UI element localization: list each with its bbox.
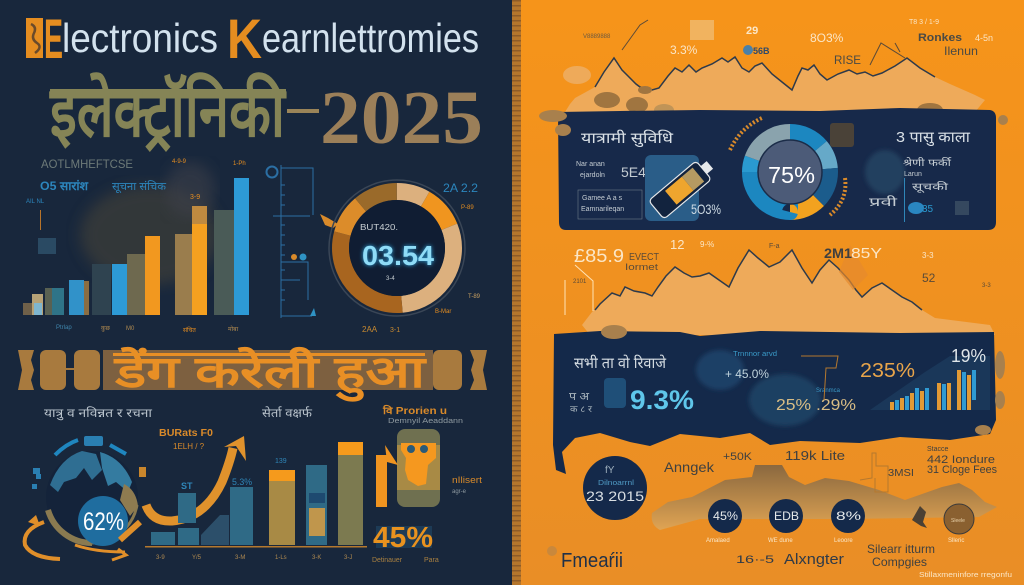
stat circle: 8%: 8% xyxy=(836,509,861,523)
text: section labels: यात्रु व नविन्नत र रचना xyxy=(44,406,153,421)
text: lower right labels: 3MSI xyxy=(888,468,914,479)
stat circle: centre: EDB xyxy=(774,509,799,523)
chart: upper orange mountain line: T8 3 / 1-9 xyxy=(909,19,939,26)
bar chart: rising bars: कुछ xyxy=(101,326,111,332)
bar chart: lower columns: 5.3% xyxy=(232,477,252,487)
bar chart: rising bars: M0 xyxy=(126,326,135,332)
stat circle: 45%: Amalaed xyxy=(706,538,730,544)
text: footer labels: Stillaxmeninfore rregonfu xyxy=(919,572,1012,579)
chart: upper orange mountain line: 3.3% xyxy=(670,43,698,57)
chart: lower orange mountain line: 3-3 xyxy=(922,251,934,260)
bar chart: lower columns: 3-M xyxy=(235,555,245,561)
text: footer labels: Alxngter xyxy=(784,551,844,568)
panel: lower navy dashboard with tail: सभी ता वो रिवाजे xyxy=(574,354,667,372)
donut gauge: P-89 xyxy=(461,205,474,211)
stat circle: large year: fY xyxy=(605,465,615,476)
text: footer labels: Silearr itturm xyxy=(867,542,935,556)
text: panel headline right: 3 पासु काला xyxy=(896,129,971,147)
arrow: growth curve: 1ELH / ? xyxy=(173,442,205,451)
title: hindi and year xyxy=(48,72,483,160)
chart: upper orange mountain line: 8O3% xyxy=(810,31,844,45)
panel: lower navy dashboard with tail: प अ xyxy=(569,391,590,403)
text: lower right labels: 442 Iondure xyxy=(927,454,995,466)
stat: 235%: 235% xyxy=(860,360,915,382)
text: panel headline left: यात्रामी सुविधि xyxy=(581,129,674,148)
chart: blue ruler gauge xyxy=(266,165,338,318)
chart: lower orange mountain line: 12 xyxy=(670,237,684,252)
bar chart: lower columns: 1-Ls xyxy=(275,555,287,561)
chart: lower orange mountain line: 52 xyxy=(922,271,936,285)
chart: upper orange mountain line: 56B xyxy=(753,46,770,56)
bar chart: rising bars: 1-Ph xyxy=(233,161,246,167)
chart: mini bars xyxy=(870,356,990,410)
stat: 45%: 45% xyxy=(373,522,433,554)
chart: lower orange mountain line: 9-% xyxy=(700,240,714,249)
text: panel right stats: प्रवी xyxy=(869,195,899,209)
donut gauge: B-Mar xyxy=(435,309,451,315)
bar chart: rising bars: 3-9 xyxy=(190,194,200,201)
arrow: growth curve: BURats F0 xyxy=(159,428,213,439)
bar chart: rising bars: AIL NL xyxy=(26,199,45,205)
stat circle: small brown xyxy=(912,504,974,544)
stat: 19%: 19% xyxy=(951,346,986,366)
panel: lower navy dashboard with tail: Sranmca xyxy=(816,388,841,394)
text: panel right stats: Larun xyxy=(904,171,922,178)
chart: upper orange mountain line xyxy=(563,19,993,117)
striped divider xyxy=(512,0,521,585)
stat: 9.3%: 9.3% xyxy=(630,385,694,415)
stat circle: small brown: Slleric xyxy=(948,538,964,544)
bar chart: rising bars: O5 सारांश xyxy=(40,179,89,193)
text: section labels xyxy=(44,406,313,421)
chart: lower orange mountain line: 85Y xyxy=(851,245,882,262)
stat: 45%: Para xyxy=(424,557,439,564)
donut gauge: 3-1 xyxy=(390,327,400,334)
donut gauge: 03.54 xyxy=(362,240,434,271)
icon: circuit device xyxy=(645,155,721,221)
chart: upper orange mountain line: 4-5n xyxy=(975,33,993,43)
stat circle: centre xyxy=(768,499,803,544)
bottom brown mountain xyxy=(652,465,997,530)
donut gauge: T-89 xyxy=(468,294,481,300)
panel: right orange background xyxy=(512,0,1024,585)
chart: lower orange mountain line: Iormet xyxy=(625,262,659,272)
chart: lower orange mountain line xyxy=(565,237,995,335)
title: english: E xyxy=(44,7,63,70)
chart: upper orange mountain line: V8889888 xyxy=(583,34,611,40)
text: panel left stats: Nar anan xyxy=(576,161,605,168)
donut gauge xyxy=(329,180,481,334)
banner: hindi heading: डेंग करेली हुआ xyxy=(112,346,428,402)
panel: left dark background xyxy=(0,0,512,585)
text: footer labels: Fmeaŕii xyxy=(561,550,623,572)
panel: lower navy dashboard with tail: क ८ र xyxy=(570,404,592,414)
icon: phone mascot: nIlisert xyxy=(452,475,483,485)
title: english: earnlettromies xyxy=(262,15,479,61)
stat: 25% and 29%: 25% .29% xyxy=(776,397,856,414)
panel: upper navy dashboard xyxy=(539,108,1008,230)
icon: phone mascot: Demnyil Aeaddann xyxy=(388,418,463,425)
title: hindi and year: इलेक्ट्रॉनिकी xyxy=(48,72,287,152)
icon: circuit device: 5O3% xyxy=(691,201,721,217)
icon: globe with 62% bubble: 62% xyxy=(83,508,124,536)
icon: globe with 62% bubble xyxy=(25,436,146,560)
chart: lower orange mountain line: £85.9 xyxy=(574,246,624,266)
bar chart: lower columns: 3-J xyxy=(344,555,352,561)
chart: lower orange mountain line: 3-3 xyxy=(982,283,991,289)
text: panel right stats: श्रेणी फर्की xyxy=(903,157,952,169)
bar chart: lower columns: ST xyxy=(181,481,193,491)
title: hindi and year: 2025 xyxy=(320,76,483,160)
title: english: K xyxy=(227,7,262,70)
title: english: lectronics xyxy=(62,15,218,61)
bar chart: rising bars: संचित xyxy=(183,326,196,334)
chart: upper orange mountain line: 29 xyxy=(746,25,758,37)
text: footer labels xyxy=(547,542,1012,579)
chart: upper orange mountain line: Ronkes xyxy=(918,32,962,44)
text: panel right stats: सूचकी xyxy=(912,181,949,193)
icon: phone mascot xyxy=(376,404,483,507)
stat circle: large year: Dilnoarrnl xyxy=(598,480,635,487)
text: panel left stats: 5E4 xyxy=(621,164,646,180)
chart: lower orange mountain line: 2M1 xyxy=(824,245,852,261)
panel: lower navy dashboard with tail xyxy=(553,325,1005,474)
text: panel left stats: Eamnarileqan xyxy=(581,206,624,213)
bar chart: rising bars: मोबा xyxy=(228,325,239,333)
bar chart: lower columns: 3-9 xyxy=(156,555,165,561)
chart: lower orange mountain line: F-a xyxy=(769,243,780,250)
bar chart: rising bars: AOTLMHEFTCSE xyxy=(41,157,133,171)
text: footer labels: Compgies xyxy=(872,555,927,569)
text: panel right stats xyxy=(865,150,969,222)
stat circle: centre: WE dune xyxy=(768,538,793,544)
donut gauge: 03.54 xyxy=(362,240,434,271)
banner: hindi heading xyxy=(18,346,487,402)
text: section labels: सेर्ता वक्षर्फ xyxy=(262,406,313,420)
donut gauge: 3-4 xyxy=(386,276,395,282)
icon: phone mascot: वि Prorien u xyxy=(382,404,447,417)
bar chart: lower columns: 3-K xyxy=(312,555,321,561)
bar chart: lower columns: 139 xyxy=(275,458,287,465)
stat: 45%: Detinauer xyxy=(372,557,403,564)
bar chart: lower columns xyxy=(145,442,367,561)
stat circle: 45%: 45% xyxy=(713,509,738,523)
bar chart: rising bars: Ptrlap xyxy=(56,325,72,331)
stat: 45% xyxy=(372,522,439,564)
chart: upper orange mountain line: RISE xyxy=(834,53,861,67)
chart: 75% donut: 75% xyxy=(768,162,815,188)
text: panel right stats: 35 xyxy=(922,204,934,215)
bar chart: rising bars: 4-9-9 xyxy=(172,159,187,165)
chart: lower orange mountain line: EVECT xyxy=(629,252,659,263)
bar chart: rising bars xyxy=(23,157,249,334)
chart: 75% donut xyxy=(730,118,854,215)
chart: upper orange mountain line: Ilenun xyxy=(944,44,978,58)
donut gauge: 2AA xyxy=(362,325,378,334)
stat circle: large year xyxy=(583,456,647,520)
bar chart: lower columns: Y/5 xyxy=(192,555,202,561)
text: lower right labels xyxy=(664,446,997,492)
text: panel left stats: ejardoln xyxy=(580,172,605,179)
stat circle: small brown: Sleele xyxy=(951,518,965,524)
donut gauge: 2A 2.2 xyxy=(443,181,478,195)
stat circle: 8% xyxy=(831,499,865,544)
donut gauge: BUT420. xyxy=(360,223,398,232)
text: lower right labels: Stacce xyxy=(927,446,949,453)
icon: phone mascot: agr-e xyxy=(452,489,467,495)
text: lower right labels: Anngek xyxy=(664,459,715,475)
text: footer labels: 16·-5 xyxy=(736,554,774,566)
text: lower right labels: +50K xyxy=(723,451,753,463)
panel: lower navy dashboard with tail: + 45.0% xyxy=(725,367,769,381)
text: panel left stats: Gamee A a s xyxy=(582,195,623,202)
stat circle: 45% xyxy=(706,499,742,544)
text: lower right labels: 119k Lite xyxy=(785,448,845,463)
stat circle: 8%: Leoore xyxy=(834,538,853,544)
text: panel left stats xyxy=(576,161,646,219)
title: english xyxy=(26,7,479,70)
bar chart: rising bars: सूचना संचिक xyxy=(112,180,167,194)
text: lower right labels: 31 Cloge Fees xyxy=(927,464,997,476)
panel: lower navy dashboard with tail: Trnnnor arvd xyxy=(733,351,777,358)
stat circle: large year: 23 2015 xyxy=(586,488,644,504)
chart: lower orange mountain line: 2101 xyxy=(573,279,587,285)
arrow: growth curve xyxy=(146,428,246,521)
